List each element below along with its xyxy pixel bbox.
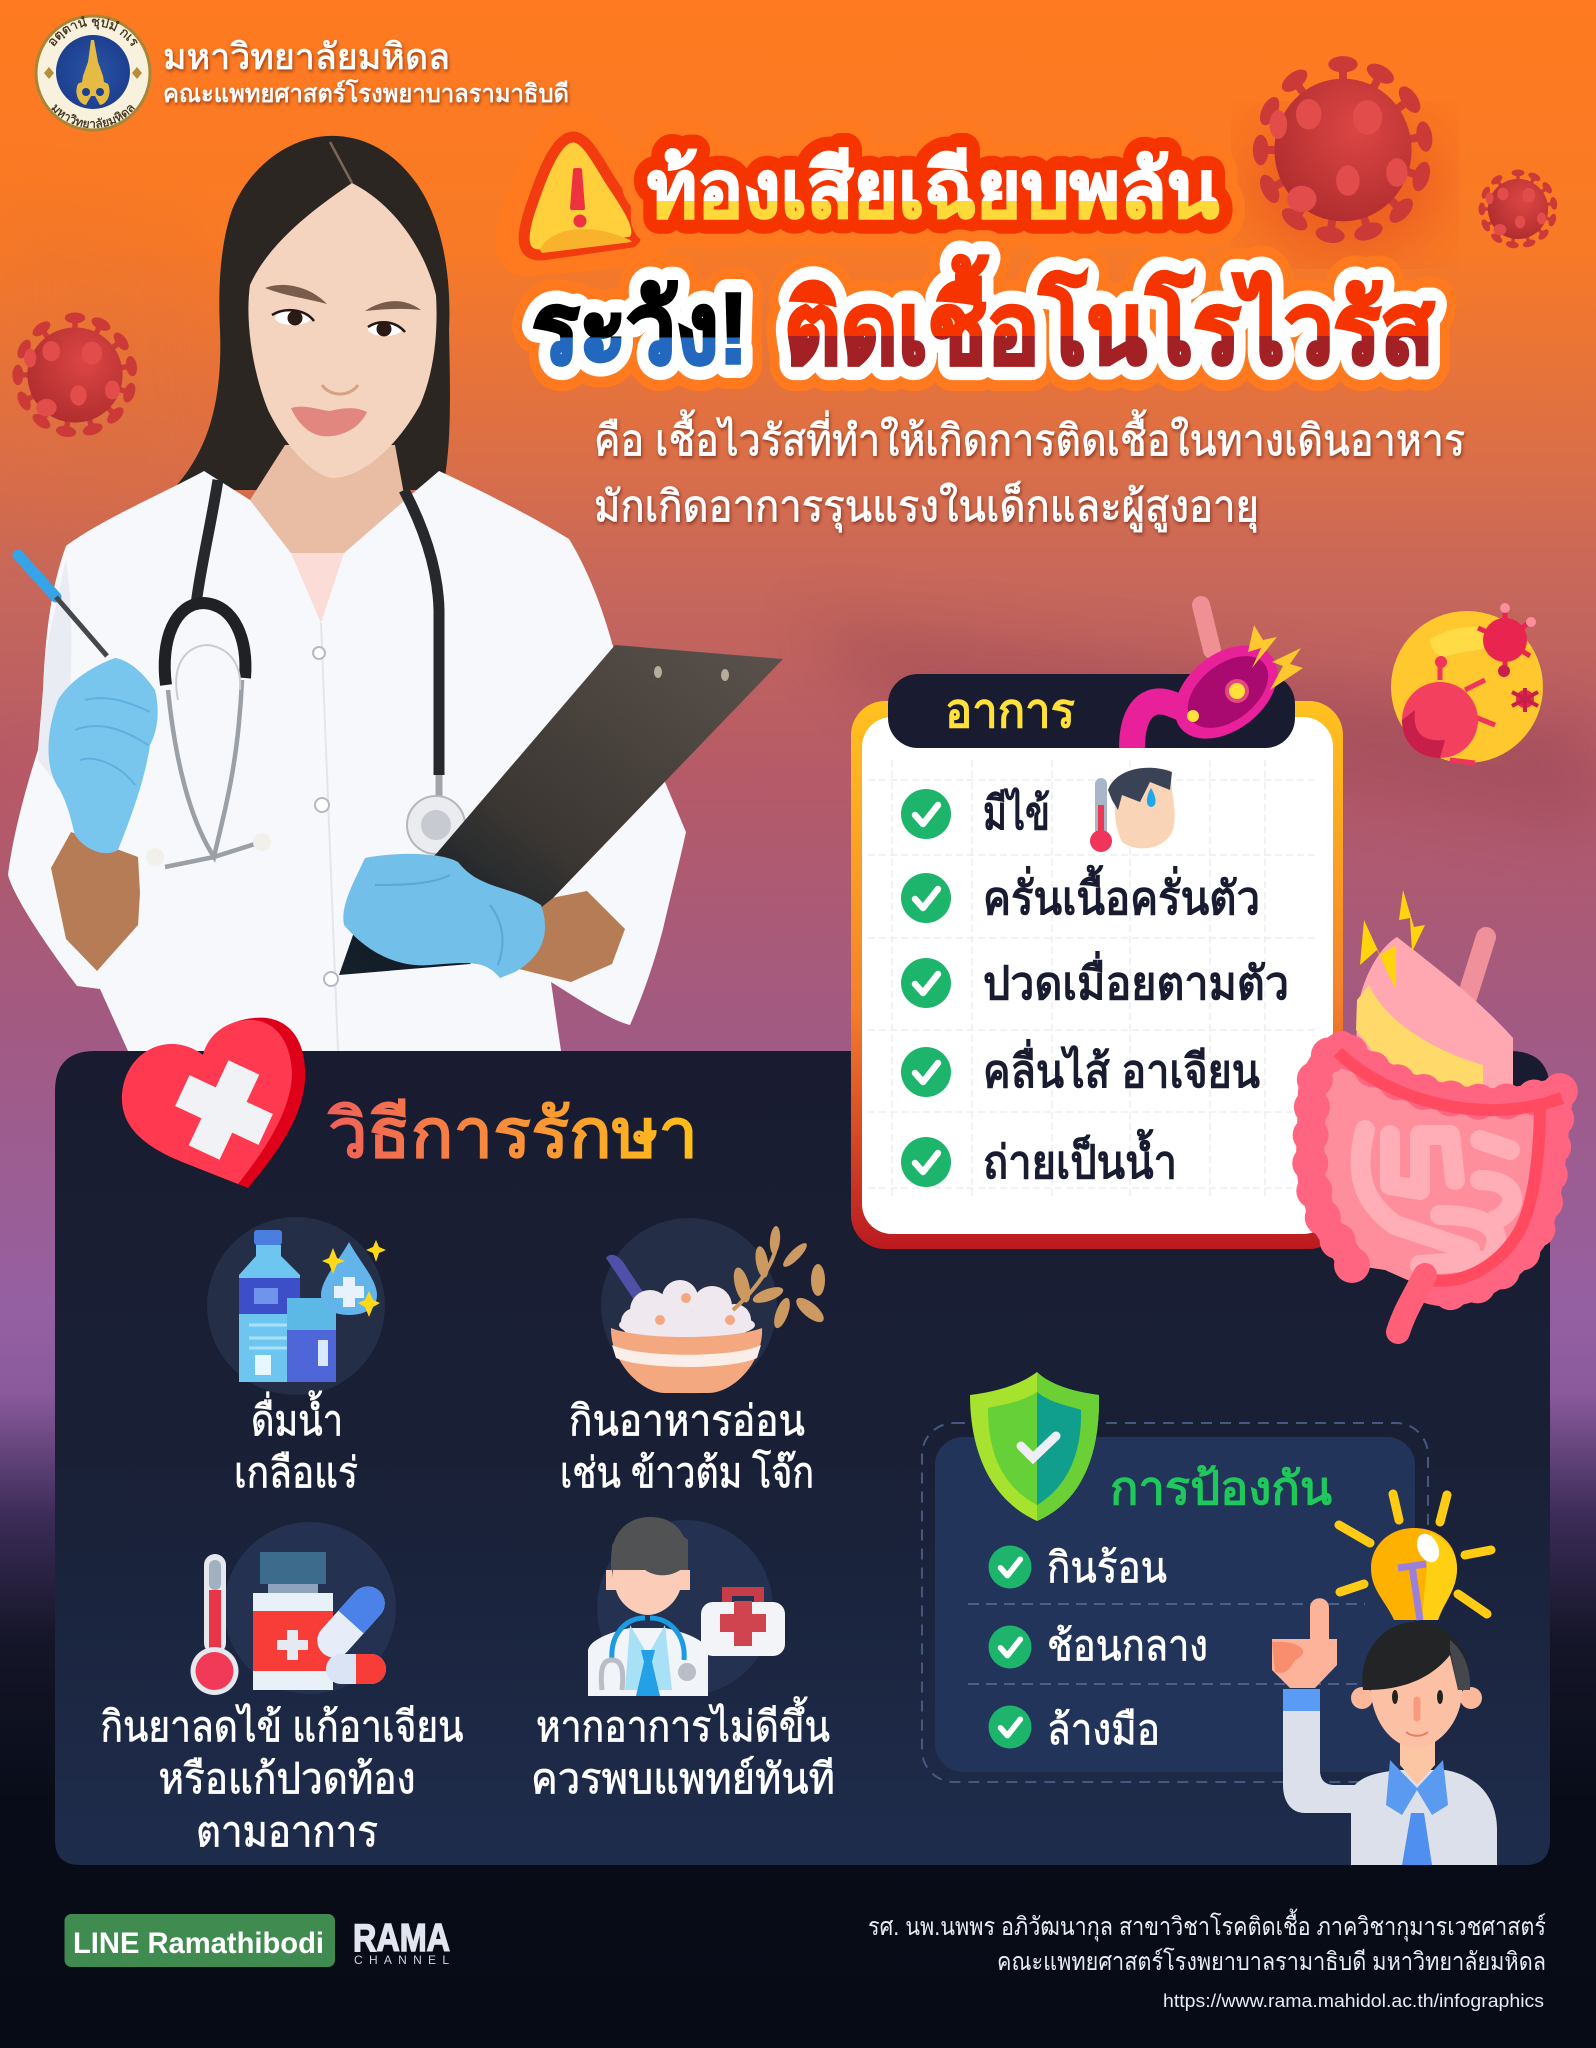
- small intestine loops: [1360, 1130, 1512, 1265]
- title line 2: ระวัง!: [532, 273, 748, 385]
- virus: left of doctor: [12, 312, 138, 438]
- card header pill: [888, 674, 1295, 748]
- LINE badge: [64, 1914, 335, 1967]
- title line 1: ท้องเสียเฉียบพลัน: [647, 145, 1219, 234]
- intro text: คือ เชื้อไวรัสที่ทำให้เกิดการติดเชื้อในทางเดินอาหาร: [594, 409, 1465, 465]
- intestine backing: [1310, 1045, 1560, 1292]
- dashed frame: [922, 1423, 1428, 1782]
- clipboard clip holes: [654, 666, 729, 681]
- treatment heading: วิธีการรักษา: [327, 1096, 698, 1172]
- footer: url: https://www.rama.mahidol.ac.th/infographics: [1163, 1990, 1544, 2011]
- icon: yellow virus ball: [1391, 603, 1543, 763]
- coat shading: [38, 560, 71, 790]
- stethoscope tubes: [196, 480, 439, 775]
- bulb rays: [1339, 1494, 1491, 1614]
- symptom row 5: ถ่ายเป็นน้ำ: [983, 1128, 1177, 1188]
- inner pink shirt: [291, 553, 344, 623]
- clipboard: [339, 645, 783, 975]
- symptom row 1: มีไข้: [983, 787, 1050, 839]
- hair part: [330, 142, 352, 183]
- wheat: [733, 1238, 778, 1310]
- symptom row 1: [901, 787, 1050, 839]
- icon: fever head: [1090, 768, 1175, 852]
- title line 2: [532, 255, 1434, 385]
- label: ดื่มน้ำ: [251, 1390, 343, 1444]
- doctor photo illustration: [8, 136, 783, 1051]
- symptom row 4: [901, 1039, 1260, 1097]
- main dark panel: [55, 1051, 1550, 1865]
- symptom row 2: [901, 864, 1260, 924]
- icon: doctor with kit: [588, 1517, 785, 1696]
- label: กินยาลดไข้ แก้อาเจียน: [100, 1703, 464, 1750]
- RAMA channel logo: CHANNEL: [354, 1953, 449, 1967]
- treatment: soft food: [560, 1218, 828, 1496]
- neck: [250, 445, 405, 553]
- icon: stomach: [1132, 605, 1303, 758]
- virus: small top right: [1478, 169, 1558, 249]
- stomach upper: [1464, 937, 1486, 1007]
- symptom row 2: ครั่นเนื้อครั่นตัว: [983, 864, 1260, 924]
- header: university logo: [34, 14, 152, 132]
- treatment: soft food: เช่น ข้าวต้ม โจ๊ก: [560, 1448, 814, 1496]
- white coat: [8, 471, 686, 1051]
- eyes: [275, 311, 311, 325]
- prevention heading: การป้องกัน: [1110, 1462, 1333, 1514]
- title line 2: ระวัง!: [532, 273, 748, 385]
- blurred hospital backdrop: [0, 190, 1596, 860]
- intro text: [594, 409, 1465, 533]
- treatment: drink water: [207, 1217, 386, 1496]
- rectum: [1398, 1275, 1425, 1332]
- prevention item 2: [988, 1622, 1208, 1669]
- stethoscope headset: [165, 603, 245, 685]
- treatment: see a doctor: [531, 1517, 835, 1802]
- panel: symptoms card: [851, 605, 1343, 1249]
- card border: [851, 701, 1343, 1249]
- icon: bottle and glass: [239, 1230, 386, 1382]
- prevention item 1: กินร้อน: [1047, 1544, 1167, 1591]
- left forearm: [51, 832, 140, 971]
- label: กินอาหารอ่อน: [569, 1397, 805, 1444]
- header: university logo: มหาวิทยาลัยมหิดล: [52, 104, 135, 128]
- inner box: [935, 1437, 1415, 1772]
- pen: [18, 555, 107, 656]
- icon: heart with cross: [122, 1018, 305, 1188]
- prevention item 3: [988, 1706, 1160, 1753]
- dividers: [968, 1604, 1365, 1684]
- title line 1: ท้องเสียเฉียบพลัน: [647, 145, 1219, 234]
- coat buttons: [313, 647, 338, 986]
- RAMA channel logo: RAMA: [353, 1917, 450, 1960]
- eyebrows: [265, 285, 327, 304]
- card body: [862, 717, 1333, 1234]
- left glove: [48, 658, 158, 853]
- treatment: medicine: หรือแก้ปวดท้อง: [158, 1755, 416, 1802]
- symptom row 3: ปวดเมื่อยตามตัว: [983, 951, 1289, 1009]
- lips: [291, 407, 367, 436]
- footer: credit: [868, 1908, 1546, 1976]
- treatment: drink water: เกลือแร่: [234, 1449, 358, 1496]
- coat centre placket: [321, 623, 612, 1051]
- LINE badge: LINE Ramathibodi: [73, 1927, 324, 1960]
- title line 2: ติดเชื้อโนโรไวรัส: [784, 255, 1434, 385]
- nose: [322, 385, 358, 394]
- icon: intestines: [1310, 890, 1562, 1332]
- stethoscope chest piece: [407, 775, 465, 854]
- prevention item 1: [988, 1544, 1167, 1591]
- light bulb: [1371, 1528, 1457, 1620]
- title line 2: ระวัง!: [532, 273, 748, 385]
- title line 2: ติดเชื้อโนโรไวรัส: [784, 255, 1434, 385]
- icon: man pointing: [1272, 1494, 1497, 1865]
- icon: bowl of porridge: [606, 1226, 828, 1393]
- treatment: medicine: ตามอาการ: [196, 1808, 378, 1855]
- title line 2: ติดเชื้อโนโรไวรัส: [784, 255, 1434, 385]
- symptom row 4: คลื่นไส้ อาเจียน: [983, 1039, 1260, 1097]
- prevention item 2: ช้อนกลาง: [1047, 1622, 1208, 1669]
- header: faculty name: คณะแพทยศาสตร์โรงพยาบาลรามาธิบดี: [163, 79, 569, 108]
- warning triangle: [496, 112, 672, 276]
- intro text: มักเกิดอาการรุนแรงในเด็กและผู้สูงอายุ: [594, 481, 1259, 533]
- header: university logo: อตฺตานํ ชุปมํ กเร: [49, 16, 138, 46]
- large intestine: [1310, 1045, 1560, 1292]
- header: university name: มหาวิทยาลัยมหิดล: [163, 36, 450, 77]
- symptom row 3: [901, 951, 1289, 1009]
- panel: prevention: [922, 1372, 1497, 1865]
- symptom row 5: [901, 1128, 1177, 1188]
- icon: shield: [970, 1372, 1099, 1521]
- card heading: อาการ: [945, 685, 1075, 738]
- label: หากอาการไม่ดีขึ้น: [536, 1696, 830, 1750]
- virus: large top right: [1250, 56, 1440, 255]
- right glove: [343, 854, 545, 978]
- treatment: medicine: [100, 1522, 464, 1855]
- title line 1: ท้องเสียเฉียบพลัน: [647, 145, 1219, 234]
- icon: thermometer and pills: [190, 1552, 392, 1695]
- hair back: [172, 136, 450, 490]
- right forearm: [515, 891, 625, 982]
- face: [248, 183, 437, 478]
- prevention item 3: ล้างมือ: [1047, 1706, 1160, 1753]
- treatment: see a doctor: ควรพบแพทย์ทันที: [531, 1755, 835, 1802]
- lightning bolts: [1360, 890, 1425, 990]
- card grid: [868, 760, 1318, 1200]
